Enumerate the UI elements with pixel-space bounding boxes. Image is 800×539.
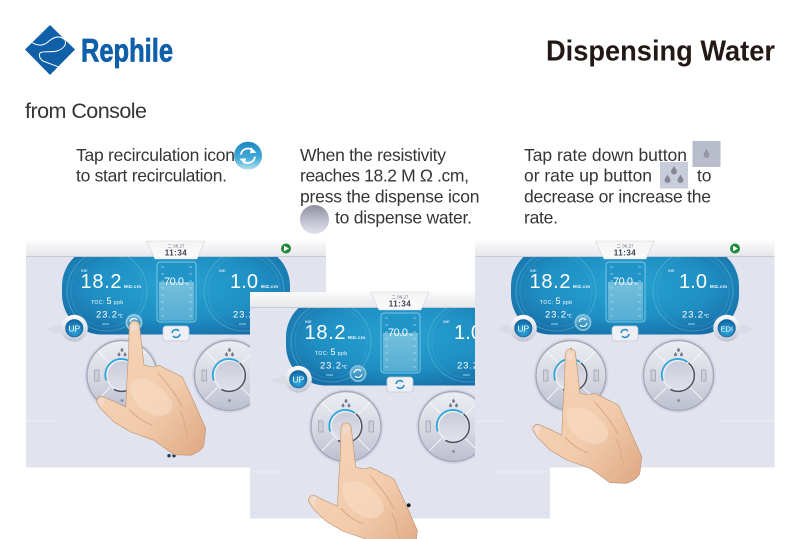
- UP tank button: [47, 315, 88, 342]
- text block: step 2: When the resistivity: [300, 145, 446, 165]
- panel: console screen, step 2: [250, 292, 550, 539]
- text block: step 3: Tap rate down button: [524, 145, 687, 165]
- text block: step 3: [524, 145, 712, 228]
- wordmark: Rephile: [81, 32, 173, 68]
- title: Dispensing Water: [546, 36, 775, 68]
- water tank gauge: 70.0: [613, 276, 633, 288]
- header bar: 11:34: [389, 300, 411, 308]
- water tank gauge: %: [409, 332, 413, 337]
- blue display: [62, 246, 290, 334]
- left reading: [80, 268, 141, 320]
- refresh button: [612, 326, 638, 341]
- subheading: from Console: [25, 99, 147, 123]
- left reading: MΩ.cm: [573, 284, 590, 289]
- text block: step 3: rate.: [524, 208, 558, 228]
- header bar: 二 06.27: [167, 244, 185, 248]
- blue display: [286, 297, 514, 386]
- icon: rate up button: [660, 162, 688, 188]
- left reading: 23.2: [320, 360, 341, 372]
- right dial: [641, 338, 716, 413]
- text block: step 3: to: [697, 166, 712, 186]
- right reading: INE: [443, 319, 450, 324]
- EDI tank button: EDI: [271, 324, 284, 333]
- water tank gauge: 70.0: [388, 327, 408, 339]
- recirculation button: [350, 365, 366, 382]
- UP tank button: [271, 366, 312, 393]
- header bar: [475, 241, 774, 259]
- hand tapping rate button: [533, 349, 642, 483]
- header bar: 二 06.27: [391, 294, 409, 300]
- left reading: 23.2: [96, 310, 117, 320]
- UP tank button: UP: [292, 374, 305, 384]
- right reading: 23.2: [233, 310, 254, 320]
- water tank gauge: %: [185, 281, 189, 286]
- right reading: 1.0: [230, 271, 258, 293]
- blue display: [511, 246, 739, 334]
- page dot: [407, 503, 411, 507]
- right reading: INE: [668, 268, 675, 273]
- text block: step 3: or rate up button: [524, 166, 652, 186]
- text block: step 1: [76, 145, 235, 186]
- header bar: 二 06.27: [616, 244, 634, 248]
- left reading: [304, 319, 365, 372]
- right reading: ℃: [254, 314, 260, 320]
- icon: recirculation: [234, 142, 262, 170]
- right reading: MΩ.cm: [261, 284, 278, 289]
- right reading: [668, 268, 727, 320]
- text block: step 3: decrease or increase the: [524, 187, 711, 207]
- left dial: [308, 389, 384, 464]
- right reading: INE: [219, 268, 226, 273]
- left dial: [84, 338, 160, 413]
- left reading: TOC: 5 ppb: [91, 296, 123, 306]
- header bar: 11:34: [614, 248, 636, 258]
- icon: dispense button: [300, 205, 329, 234]
- water tank gauge: %: [634, 281, 638, 286]
- right reading: [443, 319, 482, 372]
- EDI tank button: EDI: [720, 324, 733, 333]
- right reading: ℃: [704, 314, 710, 320]
- EDI tank button: [713, 315, 754, 342]
- UP tank button: UP: [68, 323, 81, 333]
- left reading: TOC: 5 ppb: [540, 296, 572, 306]
- left reading: 18.2: [304, 322, 346, 344]
- left reading: ℃: [118, 314, 124, 320]
- left reading: 18.2: [530, 271, 570, 293]
- UP tank button: UP: [517, 323, 530, 333]
- hand pointing at recirculation icon: [97, 321, 206, 455]
- water tank gauge: [157, 262, 196, 322]
- text block: step 1: Tap recirculation icon: [76, 145, 235, 165]
- panel: console screen, step 3: [475, 241, 774, 483]
- left reading: [530, 268, 590, 320]
- refresh button: [387, 377, 413, 392]
- refresh button: [163, 326, 189, 341]
- hand pressing dispense button: [308, 423, 417, 539]
- left reading: MΩ.cm: [124, 284, 141, 289]
- text block: step 2: [300, 145, 480, 228]
- UP tank button: [496, 315, 537, 342]
- left dial: [534, 338, 608, 413]
- text block: step 1: to start recirculation.: [76, 166, 227, 186]
- left reading: INE: [530, 268, 537, 273]
- left reading: ℃: [566, 314, 572, 320]
- water tank gauge: [606, 262, 645, 322]
- panel: console screen, step 1: [26, 241, 326, 468]
- left reading: TOC: 5 ppb: [315, 347, 347, 357]
- right dial: [192, 338, 267, 413]
- right reading: 1.0: [679, 271, 707, 293]
- right reading: [219, 268, 278, 320]
- left reading: ℃: [342, 364, 348, 370]
- right reading: 23.2: [682, 310, 703, 320]
- left reading: MΩ.cm: [348, 335, 365, 340]
- header bar: [250, 292, 550, 310]
- text block: step 2: to dispense water.: [335, 208, 472, 228]
- right dial: [416, 389, 491, 464]
- header bar: [26, 241, 326, 259]
- page dots: [169, 454, 174, 457]
- EDI tank button: [264, 315, 305, 342]
- text block: step 2: press the dispense icon: [300, 187, 480, 207]
- icon: blue diamond with R swoosh: [25, 25, 75, 75]
- recirculation button: [126, 314, 142, 331]
- text block: step 2: reaches 18.2 M Ω .cm,: [300, 166, 469, 186]
- header bar: 11:34: [165, 248, 187, 258]
- recirculation button: [574, 314, 592, 331]
- left reading: 23.2: [545, 310, 566, 320]
- left reading: 18.2: [80, 271, 122, 293]
- right reading: MΩ.cm: [710, 284, 727, 289]
- right reading: 23.2: [457, 360, 478, 372]
- left reading: INE: [81, 268, 88, 273]
- logo: Rephile: [25, 25, 173, 75]
- water tank gauge: 70.0: [164, 276, 184, 288]
- icon: rate down button: [692, 141, 720, 167]
- right reading: 1.0: [454, 322, 482, 344]
- water tank gauge: [381, 313, 420, 373]
- left reading: INE: [305, 319, 312, 324]
